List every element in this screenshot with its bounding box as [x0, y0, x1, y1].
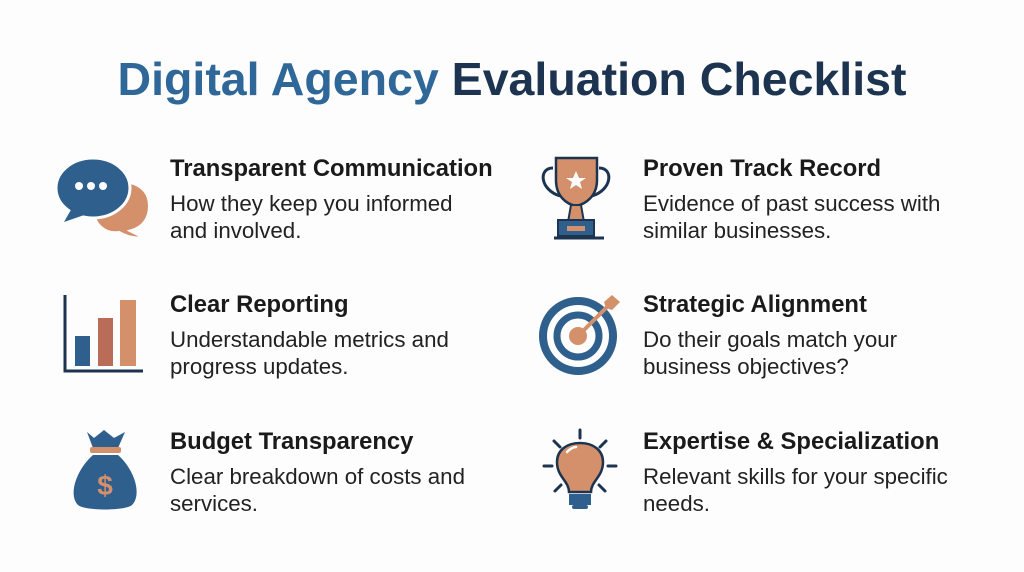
text: Expertise & Specialization: needs. — [643, 491, 710, 516]
text: Strategic Alignment: Do their goals match your — [643, 327, 897, 352]
icon: money bag — [74, 430, 137, 510]
text: Transparent Communication: How they keep you informed — [170, 191, 453, 216]
icon: chat bubbles — [56, 158, 150, 239]
text: Expertise & Specialization — [643, 428, 948, 516]
text: Strategic Alignment — [643, 291, 897, 379]
icon: light bulb — [544, 430, 616, 507]
text: Expertise & Specialization: Expertise & Specialization — [643, 428, 939, 455]
text: Transparent Communication — [170, 155, 493, 243]
text: Transparent Communication: and involved. — [170, 218, 301, 243]
text: Budget Transparency: Clear breakdown of costs and — [170, 464, 465, 489]
text: Clear Reporting — [170, 291, 449, 379]
text: Budget Transparency: Budget Transparency — [170, 428, 413, 455]
text: Clear Reporting: Understandable metrics and — [170, 327, 449, 352]
title: Digital Agency Evaluation Checklist — [118, 53, 906, 105]
text: Proven Track Record — [643, 155, 940, 243]
text: Proven Track Record: similar businesses. — [643, 218, 831, 243]
text: Strategic Alignment: business objectives? — [643, 354, 849, 379]
icon: target — [543, 295, 620, 371]
icon: bar chart — [65, 295, 143, 371]
text: Budget Transparency — [170, 428, 465, 516]
text: Transparent Communication: Transparent Communication — [170, 155, 493, 182]
text: Strategic Alignment: Strategic Alignment — [643, 291, 867, 318]
icon: trophy — [543, 158, 609, 238]
text: Expertise & Specialization: Relevant skills for your specific — [643, 464, 948, 489]
text: Proven Track Record: Evidence of past success with — [643, 191, 940, 216]
icon: money bag: $ — [97, 470, 113, 501]
text: Clear Reporting: Clear Reporting — [170, 291, 348, 318]
text: Budget Transparency: services. — [170, 491, 258, 516]
text: Proven Track Record: Proven Track Record — [643, 155, 881, 182]
text: Clear Reporting: progress updates. — [170, 354, 348, 379]
